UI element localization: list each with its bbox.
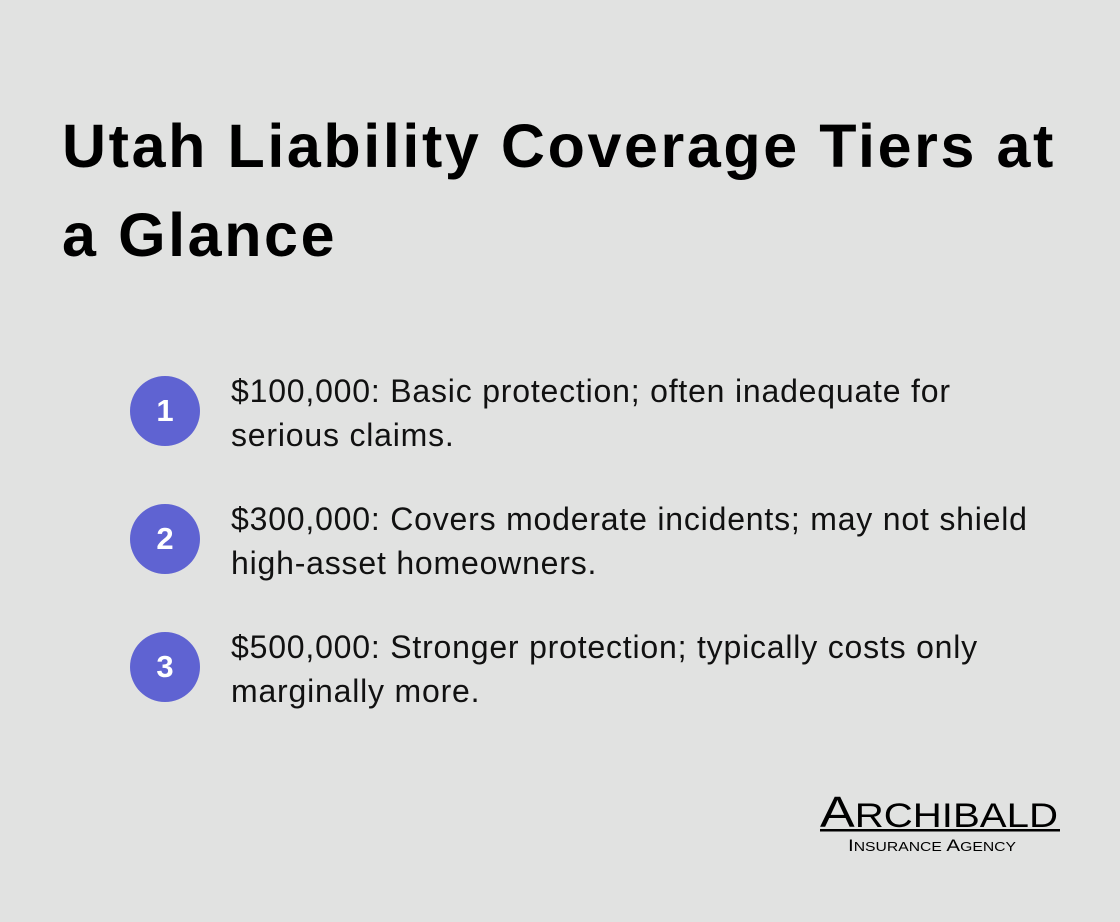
title (62, 112, 1056, 269)
badge 1: 1 (156, 393, 174, 428)
text 3: $500,000: Stronger protection; typically costs only (231, 629, 978, 665)
item 2 (130, 501, 1028, 581)
text 2 (231, 501, 1028, 581)
title: Utah Liability Coverage Tiers at (62, 112, 1056, 180)
badge 3 (130, 632, 200, 702)
logo: ARCHIBALD (820, 788, 1058, 837)
badge 3: 3 (156, 649, 174, 684)
badge 1 (130, 376, 200, 446)
text 1: $100,000: Basic protection; often inadequate for (231, 373, 951, 409)
text 2: $300,000: Covers moderate incidents; may not shield (231, 501, 1028, 537)
text 2: high-asset homeowners. (231, 545, 597, 581)
text 1: serious claims. (231, 417, 455, 453)
title: a Glance (62, 201, 337, 269)
badge 2 (130, 504, 200, 574)
item 1 (130, 373, 951, 453)
text 3: marginally more. (231, 673, 480, 709)
item 3 (130, 629, 978, 709)
badge 2: 2 (156, 521, 174, 556)
text 3 (231, 629, 978, 709)
logo: INSURANCE AGENCY (848, 836, 1016, 855)
logo (820, 788, 1060, 855)
text 1 (231, 373, 951, 453)
